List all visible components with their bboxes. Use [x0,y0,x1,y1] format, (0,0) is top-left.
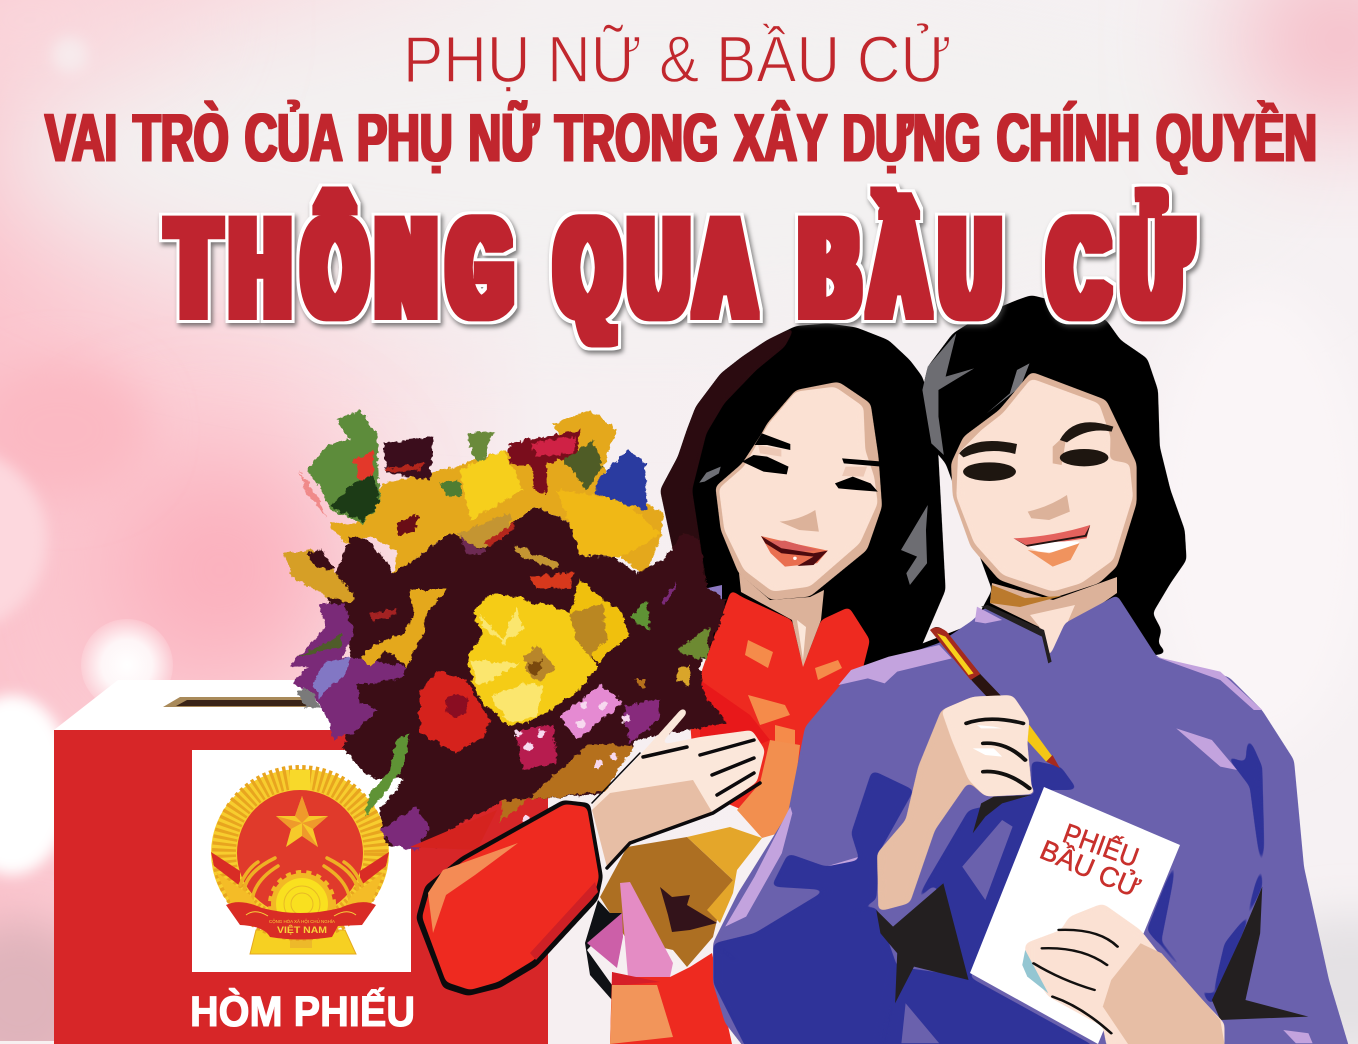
arms and pen [877,627,1224,1044]
ballot box [54,680,560,1044]
flower centre [523,645,555,683]
box front [54,730,548,1044]
pink panels [620,882,673,977]
left forearm and hand [877,695,1036,912]
green right top [563,440,603,490]
ballot slot [163,697,312,707]
black sash [876,605,1308,1020]
right hand and forearm [1025,903,1224,1044]
label: hòm phiếu: HÒM PHIẾU [190,987,415,1036]
ao dai body [713,595,1350,1044]
ribbon text: VIỆT NAM [277,924,327,936]
dark folds [660,887,717,932]
ribbon text [269,918,336,936]
light highlights [725,607,1313,1043]
gold branch [283,550,357,603]
eyes [963,462,1016,481]
red tulip [510,430,580,493]
ao dai shading [713,605,1313,1044]
title line 1: PHỤ NỮ & BẦU CỬ [403,22,952,96]
face [951,372,1137,598]
paper text: BẦU CỬ [1036,833,1146,904]
sleeve [416,800,603,996]
side ribbons [211,852,240,886]
gear [271,873,333,935]
lower wreath sides [216,872,262,915]
woman in red [585,323,946,1044]
rice stalks [240,858,362,900]
dark red bud [383,437,433,480]
hand [592,707,765,868]
blue flower [597,450,647,510]
skirt [610,953,732,1044]
top green [307,410,380,523]
purple flower left [290,603,407,740]
centre accents [460,537,487,555]
woman in purple [713,295,1350,1044]
dark blue folds [713,733,1264,1044]
dress patches [585,640,842,1044]
brow bridge shade [1053,433,1067,465]
national emblem [211,769,389,954]
title line 3: QUA [557,190,753,347]
spotted ribbons [380,685,660,850]
base [250,930,356,954]
nose [780,510,819,532]
pale bokeh circles [0,448,47,632]
big yellow flower [467,593,598,727]
title line 3: CỬ [1050,190,1189,347]
small green [467,432,493,460]
mouth [1013,525,1090,547]
title line 3 [170,190,1189,347]
face [715,382,883,600]
dark mass [327,507,727,847]
green stems lower [365,733,410,817]
title line 3: BẦU [801,190,998,347]
dress upper [690,590,870,830]
title [45,22,1317,347]
red disc [237,790,363,916]
yellow flower right [570,580,630,663]
neck [739,573,824,667]
paper text: PHIẾU [1059,818,1143,873]
flower bouquet [283,410,727,850]
pen [930,627,1060,768]
box top face [54,680,560,730]
star [276,796,328,847]
hair [888,295,1187,663]
red behind bouquet [410,810,497,850]
brows [959,441,1017,457]
finger lines [592,740,760,868]
wreath [211,769,389,937]
title line 3: THÔNG [170,190,511,347]
red flower [420,670,490,753]
orange waist [737,740,800,838]
lower dress brown [600,837,733,967]
hair [660,323,946,690]
ballot paper [970,787,1180,1044]
gold flowers top [330,410,680,600]
collar sliver [675,585,722,612]
eyes and brows [742,433,883,492]
gold panel [687,827,762,923]
neck [990,577,1117,660]
hair highlights [922,333,974,455]
white label panel [192,750,411,972]
lips [761,536,828,567]
nose [1028,495,1070,520]
ribbon [226,902,376,940]
woman in red: sleeve and hand [410,707,765,996]
ribbon text: CỘNG HÒA XÃ HỘI CHỦ NGHĨA [269,918,336,924]
gold squiggle [360,590,447,667]
